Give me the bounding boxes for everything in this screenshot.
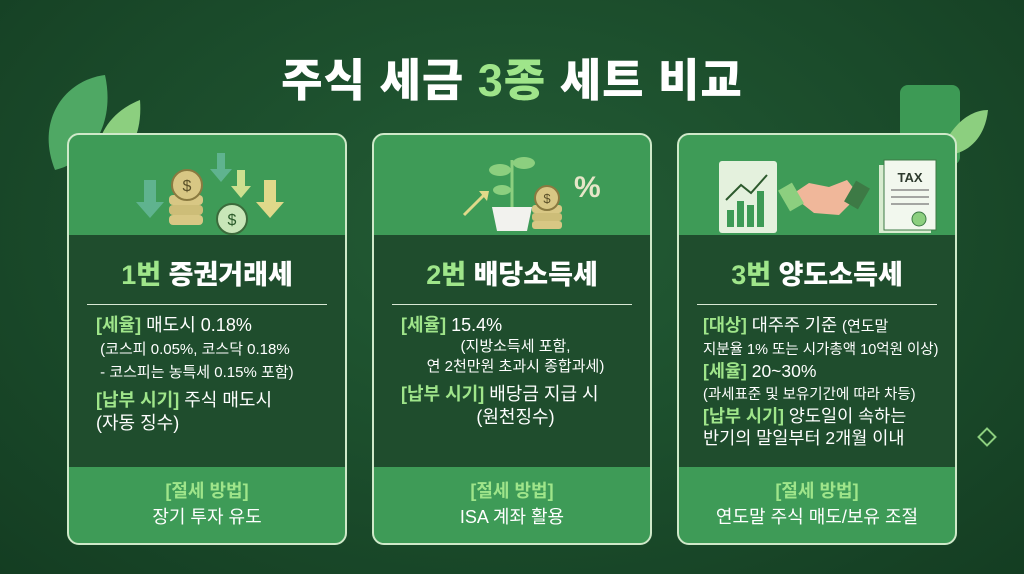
icon: chart handshake tax doc: TAX <box>897 170 923 185</box>
tax saving method: 장기 투자 유도 <box>152 507 262 527</box>
panel: 3 capital gains tax <box>677 133 957 545</box>
title: 주식 세금 3종 세트 비교 <box>281 55 743 106</box>
text: details: (지방소득세 포함, <box>461 338 570 355</box>
tax saving method <box>460 481 564 527</box>
text: details <box>96 315 294 433</box>
heading: 1번 증권거래세 <box>121 260 293 290</box>
text: details: (코스피 0.05%, 코스닥 0.18% <box>100 341 290 358</box>
panel: 2 dividend tax <box>372 133 652 545</box>
text: details: (자동 징수) <box>96 413 179 433</box>
text: details: 연 2천만원 초과시 종합과세) <box>427 358 604 375</box>
tax saving method <box>716 481 918 527</box>
text: details: [세율] 15.4% <box>401 315 502 335</box>
tax saving method: ISA 계좌 활용 <box>460 507 564 527</box>
text: details: [세율] 20~30% <box>703 361 816 381</box>
icon: coins and arrows <box>136 153 284 235</box>
tax saving method: [절세 방법] <box>775 481 859 501</box>
text: details: [납부 시기] 양도일이 속하는 <box>703 406 906 426</box>
decorative diamond <box>977 427 997 447</box>
icon: plant coins percent <box>463 157 601 231</box>
text: details: [세율] 매도시 0.18% <box>96 315 252 335</box>
text: details: [대상] 대주주 기준 (연도말 <box>703 315 888 335</box>
text: details: - 코스피는 농특세 0.15% 포함) <box>100 364 294 381</box>
text: details: [납부 시기] 배당금 지급 시 <box>401 384 599 404</box>
text: details: [납부 시기] 주식 매도시 <box>96 390 272 410</box>
heading: 3번 양도소득세 <box>731 260 903 290</box>
text: details: 반기의 말일부터 2개월 이내 <box>703 428 904 448</box>
decorative leaf left <box>48 75 140 170</box>
icon: coins and arrows: $ <box>183 178 192 195</box>
icon: coins and arrows: $ <box>228 212 237 229</box>
icon: plant coins percent: $ <box>543 191 551 206</box>
heading: 2번 배당소득세 <box>426 260 598 290</box>
panel: 1 securities transaction tax <box>67 133 347 545</box>
tax saving method: [절세 방법] <box>165 481 249 501</box>
text: details <box>401 315 604 427</box>
tax saving method: [절세 방법] <box>470 481 554 501</box>
icon: chart handshake tax doc <box>719 160 936 233</box>
text: details: 지분율 1% 또는 시가총액 10억원 이상) <box>703 342 938 358</box>
icon: plant coins percent: % <box>574 171 601 204</box>
text: details: (과세표준 및 보유기간에 따라 차등) <box>703 387 916 403</box>
text: details: (원천징수) <box>476 407 555 427</box>
decorative leaf right <box>900 85 988 163</box>
tax saving method <box>152 481 262 527</box>
text: details <box>703 315 938 448</box>
tax saving method: 연도말 주식 매도/보유 조절 <box>716 507 918 527</box>
